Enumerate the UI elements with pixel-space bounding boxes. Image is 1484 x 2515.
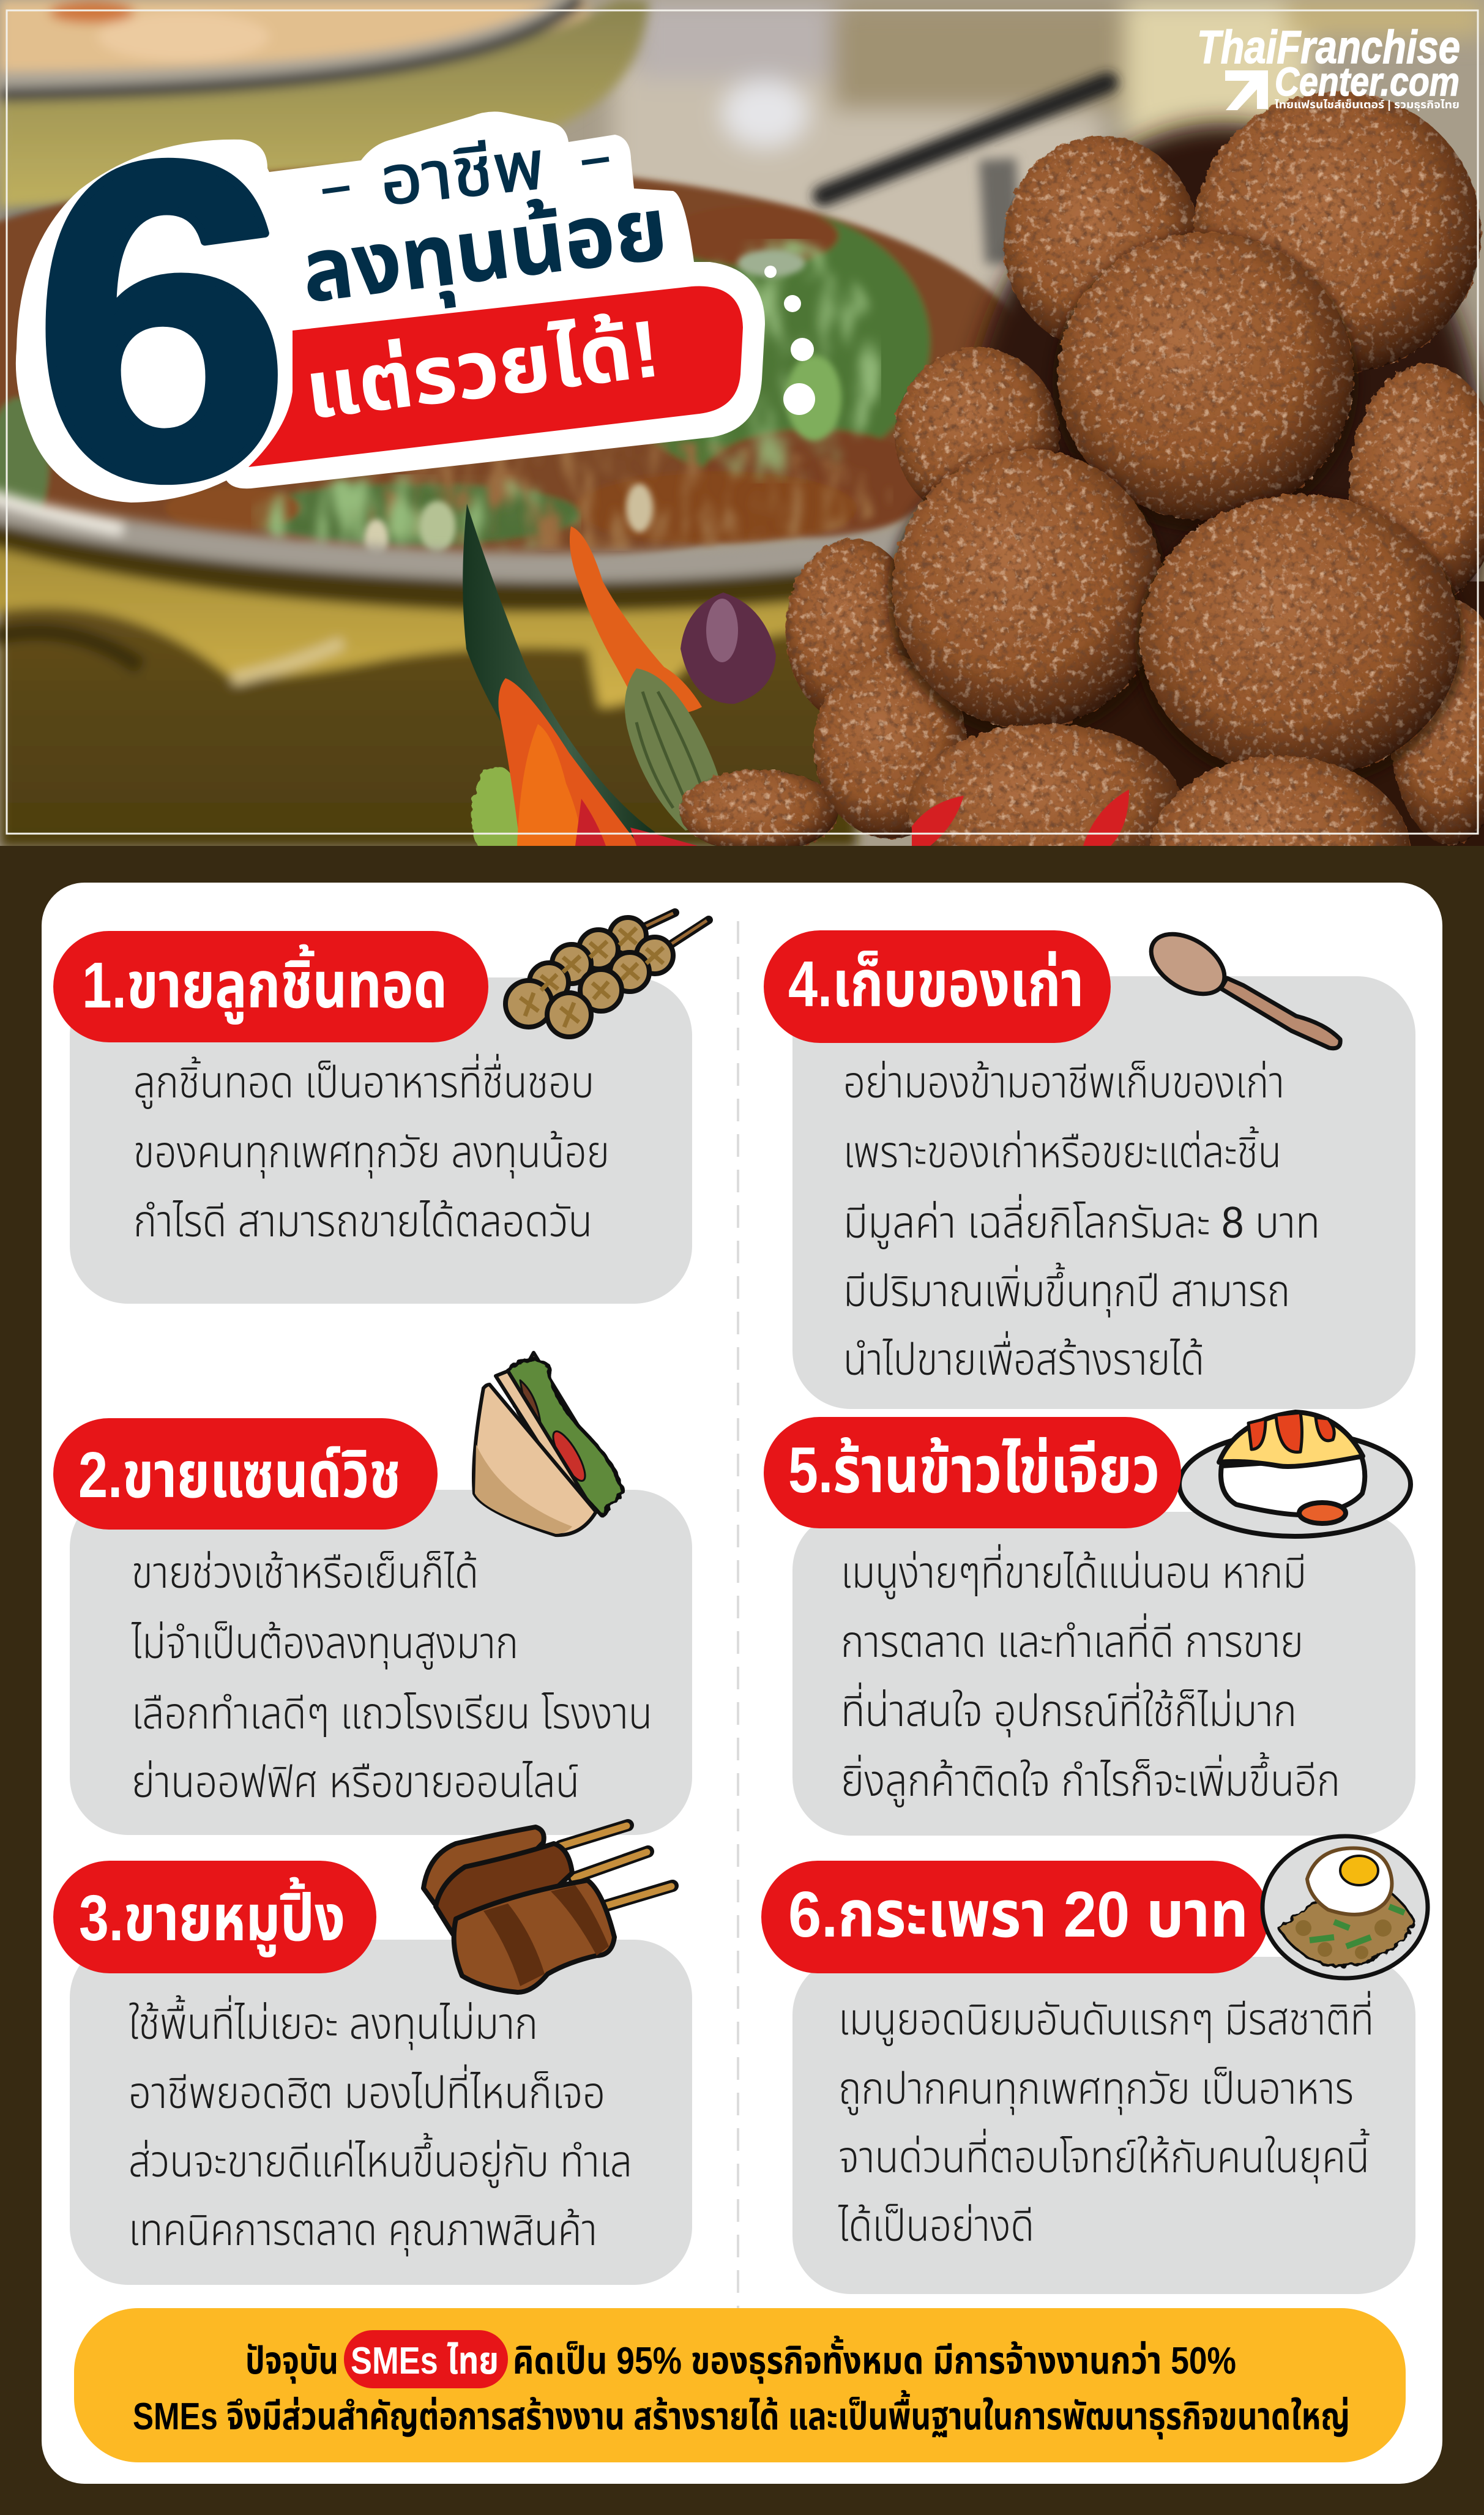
heading 5: 5.ร้านข้าวไข่เจียว xyxy=(788,1434,1160,1506)
body 3 xyxy=(129,1995,632,2257)
icon: omelette on rice xyxy=(1179,1412,1411,1536)
pill 6 xyxy=(761,1861,1269,1973)
icon: meatball skewers xyxy=(505,913,709,1037)
heading 3: 3.ขายหมูปิ้ง xyxy=(79,1877,345,1957)
body 2: ย่านออฟฟิศ หรือขายออนไลน์ xyxy=(132,1758,580,1807)
pill 5 xyxy=(764,1417,1181,1528)
hero photo: fried fish balls on a Thai food table xyxy=(0,0,1484,946)
hero white frame xyxy=(7,10,1478,834)
decorative dots xyxy=(764,266,815,415)
text box 5 xyxy=(792,1512,1415,1836)
icon: sandwich xyxy=(474,1353,623,1535)
pill 2 xyxy=(53,1418,438,1530)
text box 4 xyxy=(792,976,1415,1409)
item 6: กระเพรา 20 บาท xyxy=(761,1836,1428,2294)
body 1: กำไรดี สามารถขายได้ตลอดวัน xyxy=(133,1197,592,1246)
body 6: จานด่วนที่ตอบโจทย์ให้กับคนในยุคนี้ xyxy=(838,2128,1370,2184)
item 2: ขายแซนด์วิช xyxy=(53,1353,692,1835)
item 5: ร้านข้าวไข่เจียว xyxy=(764,1412,1415,1836)
body 5 xyxy=(841,1544,1340,1807)
body 4 xyxy=(843,1058,1320,1385)
heading: แต่รวยได้: แต่รวยได้! xyxy=(300,303,665,436)
body 3: อาชีพยอดฮิต มองไปที่ไหนก็เจอ xyxy=(129,2064,605,2118)
logo: ThaiFranchise Center.com xyxy=(1197,21,1460,111)
body 4: นำไปขายเพื่อสร้างรายได้ xyxy=(843,1331,1204,1385)
item 1: ขายลูกชิ้นทอด xyxy=(53,913,709,1304)
body 6: เมนูยอดนิยมอันดับแรกๆ มีรสชาติที่ xyxy=(838,1990,1374,2046)
garnish: chilies and eggplants xyxy=(463,504,777,862)
SMEs label: SMEs ไทย xyxy=(351,2340,499,2382)
SMEs highlight pill xyxy=(344,2330,508,2388)
body 1: ของคนทุกเพศทุกวัย ลงทุนน้อย xyxy=(133,1128,610,1179)
body 5: ที่น่าสนใจ อุปกรณ์ที่ใช้ก็ไม่มาก xyxy=(841,1682,1297,1738)
body 4: อย่ามองข้ามอาชีพเก็บของเก่า xyxy=(843,1058,1285,1107)
body 2: ไม่จำเป็นต้องลงทุนสูงมาก xyxy=(131,1619,518,1670)
title badge: 6 อาชีพ ลงทุนน้อย แต่รวยได้! xyxy=(16,69,815,572)
banner text line 1 continued: คิดเป็น 95% ของธุรกิจทั้งหมด มีการจ้างงานกว่า 50% xyxy=(513,2335,1236,2383)
fried balls xyxy=(961,122,1484,857)
banner background xyxy=(74,2308,1406,2462)
heading 4: 4.เก็บของเก่า xyxy=(788,948,1084,1020)
body 3: เทคนิคการตลาด คุณภาพสินค้า xyxy=(129,2206,597,2257)
pill 4 xyxy=(764,930,1111,1043)
banner text line 1: ปัจจุบัน xyxy=(245,2340,338,2383)
body 3: ส่วนจะขายดีแค่ไหนขึ้นอยู่กับ ทำเล xyxy=(129,2132,632,2188)
text box 3 xyxy=(70,1940,692,2285)
body 2: ขายช่วงเช้าหรือเย็นก็ได้ xyxy=(132,1549,479,1598)
text box 6 xyxy=(792,1957,1415,2294)
item 3: ขายหมูปิ้ง xyxy=(53,1825,692,2285)
pill 3 xyxy=(53,1861,376,1973)
pill 1 xyxy=(53,931,488,1042)
body 5: เมนูง่ายๆที่ขายได้แน่นอน หากมี xyxy=(841,1544,1307,1599)
body 4: เพราะของเก่าหรือขยะแต่ละชิ้น xyxy=(843,1126,1281,1177)
body 4: มีมูลค่า เฉลี่ยกิโลกรัมละ 8 บาท xyxy=(843,1194,1320,1249)
badge white sticker xyxy=(16,111,765,503)
red ribbon xyxy=(248,286,743,467)
body 5: ยิ่งลูกค้าติดใจ กำไรก็จะเพิ่มขึ้นอีก xyxy=(841,1752,1340,1807)
body 6 xyxy=(838,1990,1374,2251)
heading 2: 2.ขายแซนด์วิช xyxy=(78,1439,401,1511)
big number 6: 6 xyxy=(33,69,290,572)
body 6: ถูกปากคนทุกเพศทุกวัย เป็นอาหาร xyxy=(838,2065,1354,2115)
heading 6: 6.กระเพรา 20 บาท xyxy=(788,1878,1248,1951)
logo: ThaiFranchise Center.com: ไทยแฟรนไชส์เซ็นเตอร์ | รวมธุรกิจไทย xyxy=(1275,99,1460,111)
icon: grilled pork skewers xyxy=(423,1825,673,1992)
body 3: ใช้พื้นที่ไม่เยอะ ลงทุนไม่มาก xyxy=(129,1995,538,2050)
body 5: การตลาด และทำเลที่ดี การขาย xyxy=(841,1613,1303,1667)
heading dashes xyxy=(323,159,609,192)
icon: krapao with fried egg xyxy=(1262,1836,1428,1978)
body 6: ได้เป็นอย่างดี xyxy=(838,2202,1034,2251)
icon: logo arrow xyxy=(1225,70,1268,110)
text box 1 xyxy=(70,977,692,1304)
body 2: เลือกทำเลดีๆ แถวโรงเรียน โรงงาน xyxy=(132,1689,652,1738)
heading: ลงทุนน้อย: ลงทุนน้อย xyxy=(296,179,673,326)
table cloth and plate rim xyxy=(0,495,918,848)
icon: wooden spoon xyxy=(1141,922,1340,1048)
body 1: ลูกชิ้นทอด เป็นอาหารที่ชื่นชอบ xyxy=(133,1053,594,1109)
column divider xyxy=(737,921,739,2320)
white content panel xyxy=(42,883,1442,2484)
body 2 xyxy=(131,1549,652,1807)
text box 2 xyxy=(70,1490,692,1835)
heading 1: 1.ขายลูกชิ้นทอด xyxy=(82,944,447,1025)
callout banner: SMEs xyxy=(74,2308,1406,2462)
heading: อาชีพ: อาชีพ xyxy=(376,126,548,220)
body 1 xyxy=(133,1053,610,1246)
item 4: เก็บของเก่า xyxy=(764,922,1415,1409)
main plate of larb xyxy=(0,165,1034,569)
body 4: มีปริมาณเพิ่มขึ้นทุกปี สามารถ xyxy=(843,1262,1290,1318)
